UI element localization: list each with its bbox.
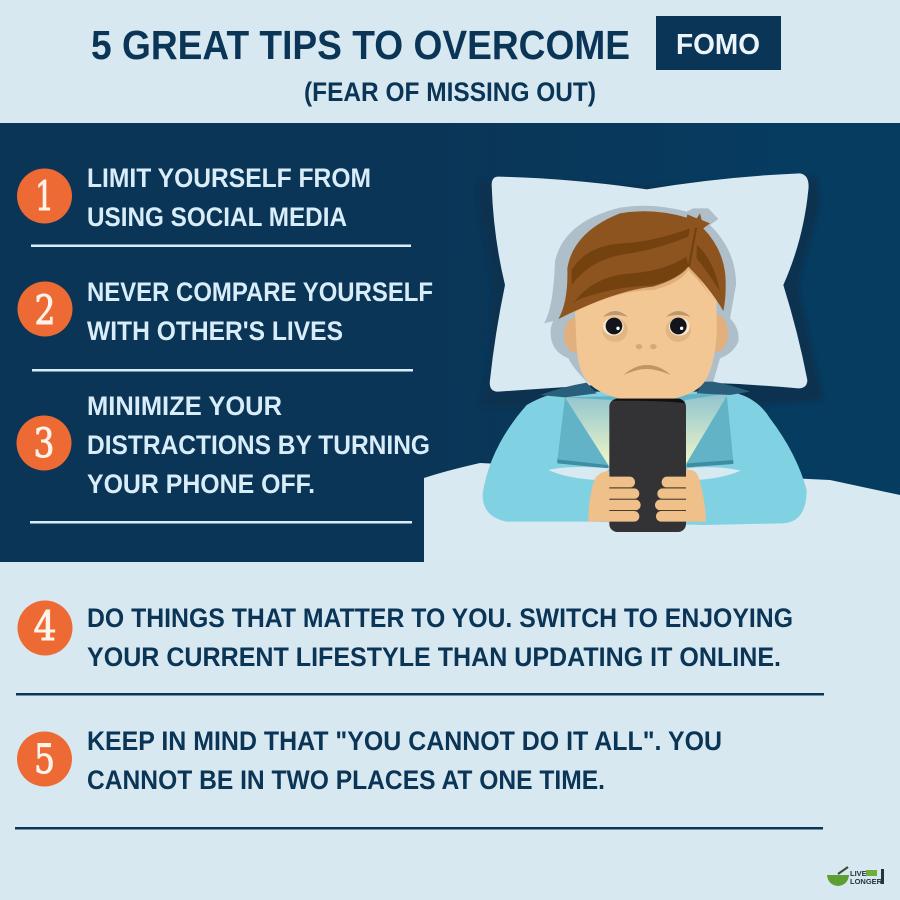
collar bottom edge — [557, 459, 733, 468]
panel: dark tips and illustration — [0, 123, 900, 562]
head — [544, 206, 739, 402]
right ear — [707, 315, 728, 352]
FOMO badge — [656, 16, 781, 70]
body and pillow — [478, 173, 823, 525]
tip 5 — [15, 726, 823, 830]
fingers — [603, 477, 690, 522]
left eye — [602, 311, 628, 342]
pillow edge band over shoulders — [540, 380, 750, 397]
face — [575, 262, 717, 402]
logo: Live Longer: LIVE — [850, 869, 867, 878]
tip 4 — [16, 600, 824, 696]
tip 3: MINIMIZE YOUR — [87, 391, 282, 421]
logo: Live Longer — [827, 867, 884, 886]
tip 5: KEEP IN MIND THAT "YOU CANNOT DO IT ALL". YOU — [87, 726, 722, 756]
illustration: person in bed looking at phone — [478, 173, 823, 532]
tip 3: DISTRACTIONS BY TURNING — [87, 430, 430, 460]
subtitle: (FEAR OF MISSING OUT) — [304, 77, 596, 107]
hair — [558, 211, 726, 319]
tip 2: NEVER COMPARE YOURSELF — [87, 277, 433, 307]
hair dark streaks — [572, 228, 720, 303]
hands — [588, 470, 706, 522]
nose — [636, 344, 657, 349]
tip 2: 2 — [34, 288, 56, 334]
title: 5 GREAT TIPS TO OVERCOME — [91, 22, 630, 68]
pillow — [490, 173, 809, 392]
bed sheet — [424, 463, 900, 562]
tip 4: 4 — [34, 604, 56, 650]
logo: Live Longer: LONGER — [850, 877, 883, 886]
head shadow on pillow — [544, 206, 739, 382]
mouth — [623, 365, 671, 375]
tip 3 — [16, 391, 430, 524]
tip 5: CANNOT BE IN TWO PLACES AT ONE TIME. — [87, 765, 605, 795]
right palm — [686, 470, 706, 522]
tip 1: 1 — [35, 174, 54, 220]
tip 1 — [17, 163, 411, 247]
FOMO badge: FOMO — [676, 29, 760, 61]
phone — [609, 399, 686, 532]
finger creases — [609, 487, 686, 511]
tip 2 — [18, 277, 433, 372]
torso and arms — [483, 392, 807, 525]
phone glow — [565, 393, 728, 467]
pillow shadow — [478, 177, 823, 408]
sleeve highlights — [548, 467, 741, 480]
hair shadow on forehead — [572, 262, 720, 313]
tip 5: 5 — [34, 737, 55, 783]
shirt collar — [557, 393, 733, 465]
left ear — [564, 318, 586, 352]
tip 2: WITH OTHER'S LIVES — [87, 316, 343, 346]
tip 3: 3 — [34, 421, 54, 467]
tip 4: YOUR CURRENT LIFESTYLE THAN UPDATING IT ONLINE. — [87, 642, 781, 672]
tip 1: USING SOCIAL MEDIA — [87, 202, 347, 232]
tip 1: LIMIT YOURSELF FROM — [87, 163, 371, 193]
tip 4: DO THINGS THAT MATTER TO YOU. SWITCH TO ENJOYING — [87, 603, 793, 633]
right eye — [666, 311, 691, 342]
tip 3: YOUR PHONE OFF. — [87, 469, 315, 499]
left palm — [588, 471, 609, 522]
